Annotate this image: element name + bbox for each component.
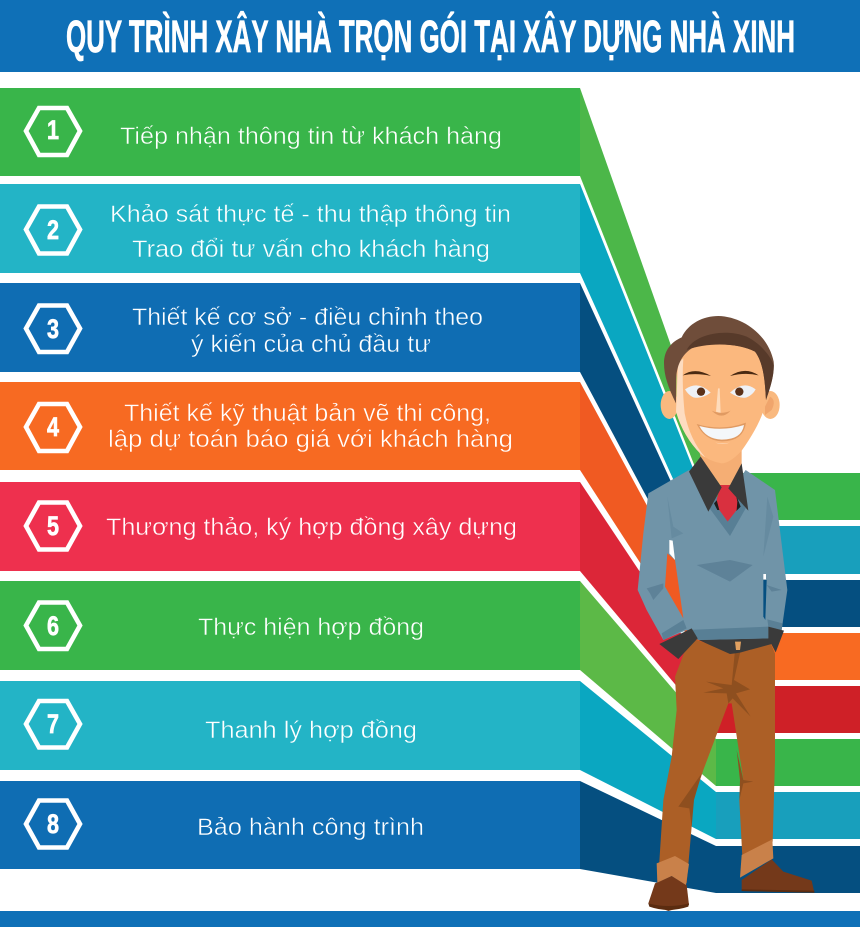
man: ears xyxy=(661,391,780,419)
step 2 text: Khảo sát thực tế - thu thập thông tin xyxy=(110,201,511,228)
icon: hexagon 3 xyxy=(26,306,80,352)
step 1 text: Tiếp nhận thông tin từ khách hàng xyxy=(120,123,502,150)
panel: step 7 xyxy=(0,681,860,839)
man: shirt cuffs xyxy=(659,627,784,659)
man: left shoe xyxy=(648,856,689,911)
step 6 text: Thực hiện hợp đồng xyxy=(198,614,424,641)
icon: hexagon 1: 1 xyxy=(47,115,59,145)
icon: hexagon 5: 5 xyxy=(47,511,59,541)
man: hair xyxy=(664,316,774,403)
step 2 text xyxy=(110,201,511,263)
icon: hexagon 7: 7 xyxy=(47,709,59,739)
step 4 text xyxy=(108,400,513,453)
man: face xyxy=(676,343,766,463)
man: eyes xyxy=(685,385,756,398)
step 3 text xyxy=(132,304,483,358)
icon: hexagon 2 xyxy=(26,206,80,254)
panel: step 6 xyxy=(0,581,860,786)
icon: hexagon 7 xyxy=(26,701,80,748)
step 3 text: Thiết kế cơ sở - điều chỉnh theo xyxy=(132,304,483,331)
panel: step 8 xyxy=(0,781,860,893)
icon: hexagon 6: 6 xyxy=(47,611,59,641)
icon: hexagon 8: 8 xyxy=(47,809,59,839)
icon: hexagon 4 xyxy=(26,404,80,451)
step 3 text: ý kiến của chủ đầu tư xyxy=(191,331,431,358)
step 4 text: Thiết kế kỹ thuật bản vẽ thi công, xyxy=(124,400,491,427)
step 2 text: Trao đổi tư vấn cho khách hàng xyxy=(132,236,490,263)
icon: hexagon 2: 2 xyxy=(47,215,59,245)
panel: step 5 xyxy=(0,482,860,733)
icon: hexagon 3: 3 xyxy=(47,314,59,344)
footer bar xyxy=(0,911,860,927)
step 5 text: Thương thảo, ký hợp đồng xây dựng xyxy=(106,514,517,541)
icon: hexagon 6 xyxy=(26,602,80,649)
step 7 text: Thanh lý hợp đồng xyxy=(205,717,417,744)
icon: hexagon 5 xyxy=(26,502,80,550)
illustration: smiling man xyxy=(638,316,814,911)
icon: hexagon 8 xyxy=(26,800,80,848)
icon: hexagon 1 xyxy=(26,108,80,155)
header banner xyxy=(0,0,860,72)
step 8 text: Bảo hành công trình xyxy=(197,814,424,841)
man: smile xyxy=(697,423,746,444)
man: nose xyxy=(712,388,731,416)
man: right shoe xyxy=(740,839,814,893)
man: eyebrows xyxy=(683,371,759,376)
man: shirt hem xyxy=(695,635,772,654)
man: neck xyxy=(697,440,742,492)
icon: hexagon 4: 4 xyxy=(47,412,59,442)
step 4 text: lập dự toán báo giá với khách hàng xyxy=(108,426,513,453)
man: sweater xyxy=(638,470,787,640)
man: trousers xyxy=(659,640,775,883)
panel: step 3 xyxy=(0,283,860,627)
panel: step 4 xyxy=(0,382,860,680)
man: tie xyxy=(714,485,741,522)
panel: step 2 xyxy=(0,184,860,574)
panel: step 1 xyxy=(0,88,860,520)
man: collar xyxy=(689,457,748,512)
